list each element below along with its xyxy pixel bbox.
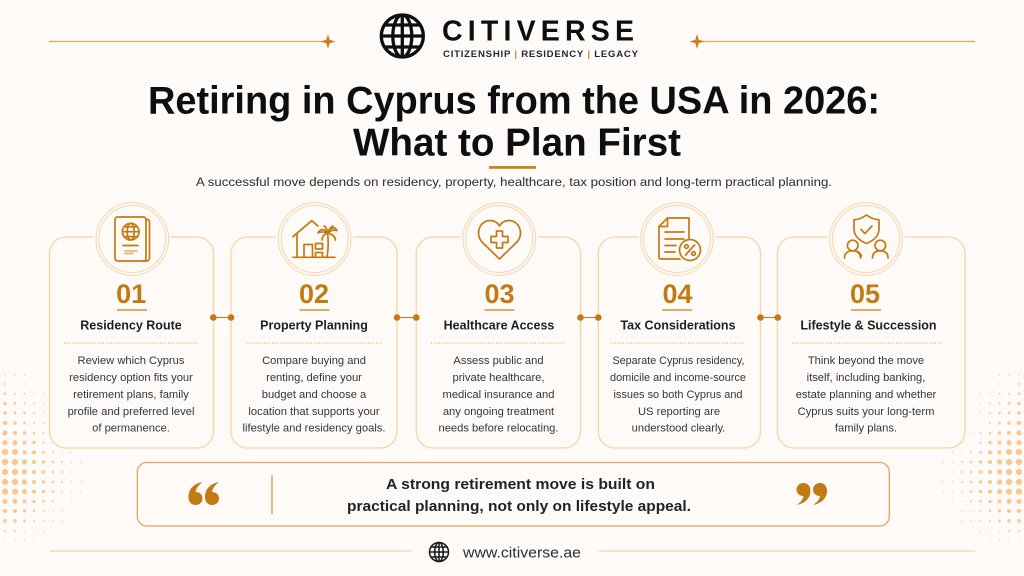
footer website: www.citiverse.ae: [462, 544, 581, 562]
halftone dots: right: [943, 375, 1019, 541]
icon: opening quote: [188, 482, 219, 505]
callout: quote box: [137, 462, 889, 526]
subtitle: A successful move depends on residency, property, healthcare, tax position and long-term practical planning.: [196, 175, 832, 189]
text: tax considerations: domicile and income-source: [610, 372, 746, 384]
icon: closing quote: [796, 483, 827, 505]
text: residency route: of permanence.: [92, 422, 170, 434]
text: healthcare access: private healthcare,: [452, 372, 545, 384]
text: healthcare access: [438, 355, 559, 434]
text: healthcare access: any ongoing treatment: [443, 406, 555, 418]
title: Retiring in Cyprus from the USA in 2026:: [148, 80, 880, 122]
text: tax considerations: issues so both Cyprus and: [614, 389, 742, 401]
heading: lifestyle and succession: Lifestyle & Succession: [800, 318, 937, 332]
icon: passport: [115, 217, 150, 261]
text: property planning: lifestyle and residency goals.: [242, 422, 386, 434]
number 01: 01: [116, 279, 146, 309]
text: healthcare access: Assess public and: [453, 355, 544, 367]
text: property planning: [242, 355, 386, 434]
number 05: 05: [850, 279, 880, 309]
title accent bar: [489, 166, 536, 169]
panel: card 5 lifestyle and succession: [777, 200, 965, 448]
text: residency route: residency option fits your: [69, 372, 193, 384]
icon: house and palm: [293, 221, 337, 257]
text: property planning: Compare buying and: [262, 355, 366, 367]
number 02: 02: [299, 279, 329, 309]
icon: document with percent: [659, 218, 700, 260]
heading: property planning: Property Planning: [260, 318, 368, 332]
number 03: 03: [484, 279, 515, 309]
text: lifestyle and succession: estate planning and whether: [796, 389, 937, 401]
text: property planning: budget and choose a: [262, 389, 367, 401]
logo: tagline: CITIZENSHIP | RESIDENCY | LEGACY: [443, 49, 639, 60]
text: property planning: renting, define your: [266, 372, 362, 384]
text: healthcare access: needs before relocating.: [438, 422, 559, 434]
heading: healthcare access: Healthcare Access: [444, 318, 554, 332]
text: lifestyle and succession: Think beyond the move: [808, 355, 924, 367]
icon: footer globe: [430, 542, 448, 562]
panel: card 3 healthcare access: [416, 200, 580, 448]
panel: card 4 tax considerations: [598, 200, 760, 448]
text: tax considerations: [610, 355, 746, 434]
number 04: 04: [662, 279, 693, 309]
quote text: A strong retirement move is built on: [386, 476, 655, 493]
text: residency route: retirement plans, family: [73, 389, 189, 401]
text: residency route: Review which Cyprus: [78, 355, 185, 367]
panel: card 2 property planning: [231, 200, 397, 448]
halftone dots: left: [5, 375, 81, 541]
header rule: right with star: [690, 34, 975, 49]
footer rules: [50, 550, 975, 552]
logo: globe icon: [381, 15, 423, 57]
title: What to Plan First: [353, 122, 681, 164]
text: property planning: location that supports your: [248, 406, 380, 418]
header rule: left with star: [49, 34, 336, 49]
quote text: practical planning, not only on lifestyle appeal.: [347, 498, 691, 515]
text: lifestyle and succession: Cyprus suits your long-term: [798, 406, 934, 418]
title: [148, 80, 880, 164]
text: tax considerations: US reporting are: [638, 406, 720, 418]
text: tax considerations: Separate Cyprus residency,: [612, 355, 744, 367]
text: lifestyle and succession: [796, 355, 937, 434]
connectors between cards: [210, 315, 781, 320]
heading: residency route: Residency Route: [80, 318, 182, 332]
text: lifestyle and succession: family plans.: [835, 422, 897, 434]
heading: tax considerations: Tax Considerations: [620, 318, 736, 332]
text: healthcare access: medical insurance and: [443, 389, 554, 401]
quote text: [347, 476, 691, 515]
text: residency route: profile and preferred level: [68, 406, 194, 418]
text: residency route: [68, 355, 194, 434]
logo: wordmark: CITIVERSE: [442, 16, 634, 48]
text: lifestyle and succession: itself, including banking,: [807, 372, 925, 384]
text: tax considerations: understood clearly.: [632, 422, 725, 434]
icon: shield with people: [844, 215, 888, 258]
icon: heart with cross: [479, 220, 520, 259]
panel: card 1 residency route: [50, 200, 214, 448]
